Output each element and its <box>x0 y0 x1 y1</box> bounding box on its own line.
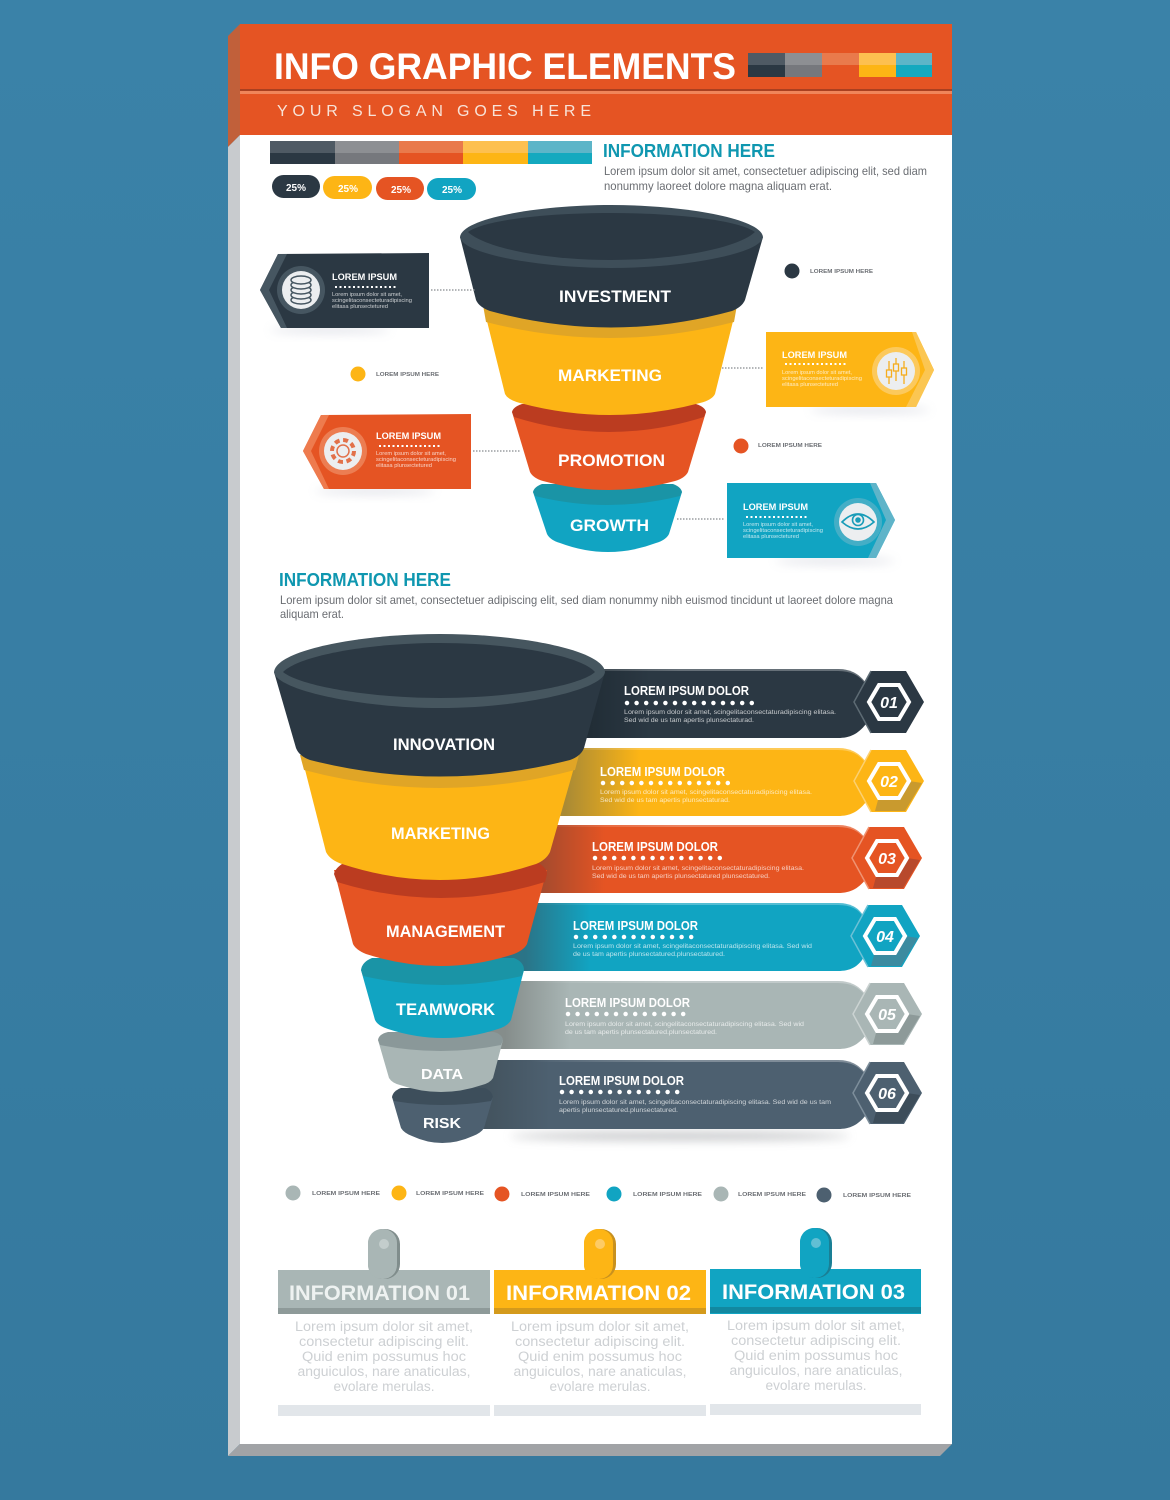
funnel management <box>334 862 547 966</box>
funnel data: DATA <box>421 1066 463 1083</box>
funnel marketing <box>483 305 737 415</box>
header band <box>240 24 952 135</box>
funnel growth <box>533 484 682 552</box>
step bar 02: Lorem ipsum dolor sit amet, scingelitaconsectaturadipiscing elitasa. <box>600 789 812 796</box>
slogan: YOUR SLOGAN GOES HERE <box>277 103 591 120</box>
step bar 01: Sed wid de us tam apertis plunsectaturad. <box>624 717 754 724</box>
step bar 06 <box>470 1060 922 1129</box>
information card 02: Lorem ipsum dolor sit amet, <box>511 1319 689 1334</box>
information card 01: INFORMATION 01 <box>289 1282 470 1305</box>
funnel marketing: MARKETING <box>558 367 662 385</box>
information heading middle: aliquam erat. <box>280 607 344 621</box>
step bar 06: apertis plunsectatured.plunsectatured. <box>559 1107 678 1114</box>
information card 02 <box>494 1229 706 1416</box>
step bar 01: 01 <box>880 695 898 712</box>
information card 03 <box>710 1228 921 1415</box>
funnel teamwork <box>361 958 524 1038</box>
funnel teamwork: TEAMWORK <box>396 1001 495 1019</box>
legend row: LOREM IPSUM HERE <box>633 1192 702 1198</box>
step bar 04: de us tam apertis plunsectatured.plunsectatured. <box>573 951 725 958</box>
header swatches <box>748 53 932 77</box>
callout: database: LOREM IPSUM <box>332 272 397 283</box>
callout: sliders: LOREM IPSUM <box>782 350 847 361</box>
step bar 03: 03 <box>878 851 896 868</box>
legend row: LOREM IPSUM HERE <box>521 1192 590 1198</box>
funnel risk: RISK <box>423 1115 461 1132</box>
icon: coin stack <box>291 276 311 304</box>
legend dots top funnel: LOREM IPSUM HERE <box>376 372 439 378</box>
information card 03: evolare merulas. <box>766 1378 866 1393</box>
callout: gear: elitasa plunsectetured <box>376 463 432 469</box>
information heading middle <box>279 570 893 621</box>
legend row: LOREM IPSUM HERE <box>312 1191 380 1197</box>
step bar 05: de us tam apertis plunsectatured.plunsectatured. <box>565 1029 717 1036</box>
callout: eye <box>727 483 895 564</box>
step bar 04 <box>500 903 920 971</box>
icon: sliders <box>886 358 906 384</box>
step bar 05: 05 <box>878 1007 897 1024</box>
legend row <box>286 1186 911 1202</box>
colour bar <box>270 141 592 164</box>
callout: sliders: Lorem ipsum dolor sit amet, <box>782 370 852 376</box>
funnel investment <box>460 205 763 328</box>
legend dots top funnel <box>350 264 873 454</box>
funnel innovation: INNOVATION <box>393 736 495 754</box>
callout: database: Lorem ipsum dolor sit amet, <box>332 292 402 298</box>
legend row: LOREM IPSUM HERE <box>843 1193 911 1199</box>
information card 02: INFORMATION 02 <box>506 1282 691 1305</box>
information card 01: evolare merulas. <box>334 1379 434 1394</box>
information card 03: INFORMATION 03 <box>722 1281 905 1304</box>
callout: database: scingelitaconsecteturadipiscing <box>332 298 412 304</box>
step bar 02: 02 <box>880 774 898 791</box>
information card 02: anguiculos, nare anaticulas, <box>514 1364 686 1379</box>
step bar 04: 04 <box>876 929 894 946</box>
information card 03: Quid enim possumus hoc <box>734 1348 898 1363</box>
icon: gear <box>332 440 354 462</box>
percentage pills: 25% <box>442 185 462 196</box>
funnel promotion <box>512 404 706 490</box>
funnel one <box>460 205 763 552</box>
information heading middle: INFORMATION HERE <box>279 570 451 590</box>
callout: sliders <box>766 332 934 413</box>
step bar 02: Sed wid de us tam apertis plunsectaturad. <box>600 797 730 804</box>
callout: sliders: elitasa plunsectetured <box>782 382 838 388</box>
information heading middle: Lorem ipsum dolor sit amet, consectetuer adipiscing elit, sed diam nonummy nibh euismod tincidunt ut laoreet dolore magna <box>280 593 893 607</box>
callout: eye: LOREM IPSUM <box>743 502 808 513</box>
icon: eye <box>842 514 874 529</box>
legend dots top funnel: LOREM IPSUM HERE <box>810 269 873 275</box>
percentage pills: 25% <box>286 183 306 194</box>
callout: eye: elitasa plunsectetured <box>743 534 799 540</box>
callout: sliders: scingelitaconsecteturadipiscing <box>782 376 862 382</box>
callout: eye: scingelitaconsecteturadipiscing <box>743 528 823 534</box>
step bar 02: LOREM IPSUM DOLOR <box>600 765 725 779</box>
step bar 01 <box>560 669 924 738</box>
bar shadow <box>510 1132 850 1140</box>
information heading top: INFORMATION HERE <box>603 141 775 161</box>
funnel promotion: PROMOTION <box>558 452 665 470</box>
step bar 02 <box>545 748 924 816</box>
step bar 05: LOREM IPSUM DOLOR <box>565 996 690 1010</box>
legend row: LOREM IPSUM HERE <box>738 1192 806 1198</box>
percentage pills: 25% <box>338 184 358 195</box>
funnel marketing <box>300 750 579 880</box>
legend dots top funnel: LOREM IPSUM HERE <box>758 443 822 449</box>
information card 02: consectetur adipiscing elit. <box>515 1334 685 1349</box>
step bar 04: Lorem ipsum dolor sit amet, scingelitaconsectaturadipiscing elitasa. Sed wid <box>573 943 812 950</box>
title: INFO GRAPHIC ELEMENTS <box>274 46 736 87</box>
information card 03: Lorem ipsum dolor sit amet, <box>727 1318 905 1333</box>
information card 03: anguiculos, nare anaticulas, <box>730 1363 902 1378</box>
percentage pills <box>272 175 476 200</box>
funnel risk <box>392 1088 493 1143</box>
callout: database: elitasa plunsectetured <box>332 304 388 310</box>
step bar 03: Sed wid de us tam apertis plunsectatured plunsectatured. <box>592 873 770 880</box>
information card 02: Quid enim possumus hoc <box>518 1349 682 1364</box>
callout: gear <box>303 414 471 494</box>
step bar 06: 06 <box>878 1086 896 1103</box>
funnel data <box>378 1032 503 1092</box>
step bar 04: LOREM IPSUM DOLOR <box>573 919 698 933</box>
callout: eye: Lorem ipsum dolor sit amet, <box>743 522 813 528</box>
information card 01: Lorem ipsum dolor sit amet, <box>295 1319 473 1334</box>
step bar 01: LOREM IPSUM DOLOR <box>624 684 749 698</box>
funnel two <box>274 634 605 1143</box>
information heading top: nonummy laoreet dolore magna aliquam erat. <box>604 179 832 193</box>
step bar 01: Lorem ipsum dolor sit amet, scingelitaconsectaturadipiscing elitasa. <box>624 709 836 716</box>
information card 01: Quid enim possumus hoc <box>302 1349 466 1364</box>
funnel growth: GROWTH <box>570 517 649 535</box>
callout: gear: Lorem ipsum dolor sit amet, <box>376 451 446 457</box>
information heading top <box>603 141 927 193</box>
funnel innovation <box>274 634 605 776</box>
book page with spine <box>228 24 952 1456</box>
information card 03: consectetur adipiscing elit. <box>731 1333 901 1348</box>
funnel marketing: MARKETING <box>391 825 490 843</box>
callout: database <box>260 253 429 333</box>
funnel management: MANAGEMENT <box>386 923 505 941</box>
information card 02: evolare merulas. <box>550 1379 650 1394</box>
legend row: LOREM IPSUM HERE <box>416 1191 484 1197</box>
funnel investment: INVESTMENT <box>559 288 671 306</box>
step bar 05 <box>480 981 922 1049</box>
step bar 03: LOREM IPSUM DOLOR <box>592 840 718 854</box>
step bar 06: LOREM IPSUM DOLOR <box>559 1074 684 1088</box>
step bar 05: Lorem ipsum dolor sit amet, scingelitaconsectaturadipiscing elitasa. Sed wid <box>565 1021 804 1028</box>
step bar 03 <box>520 825 922 893</box>
dotted connectors <box>431 290 764 519</box>
information card 01: consectetur adipiscing elit. <box>299 1334 469 1349</box>
information heading top: Lorem ipsum dolor sit amet, consectetuer adipiscing elit, sed diam <box>604 164 927 178</box>
step bar 03: Lorem ipsum dolor sit amet, scingelitaconsectaturadipiscing elitasa. <box>592 865 804 872</box>
callout: gear: scingelitaconsecteturadipiscing <box>376 457 456 463</box>
callout: gear: LOREM IPSUM <box>376 431 441 442</box>
information card 01 <box>278 1229 490 1416</box>
step bar 06: Lorem ipsum dolor sit amet, scingelitaconsectaturadipiscing elitasa. Sed wid de us tam <box>559 1099 831 1106</box>
information card 01: anguiculos, nare anaticulas, <box>298 1364 470 1379</box>
percentage pills: 25% <box>391 185 411 196</box>
